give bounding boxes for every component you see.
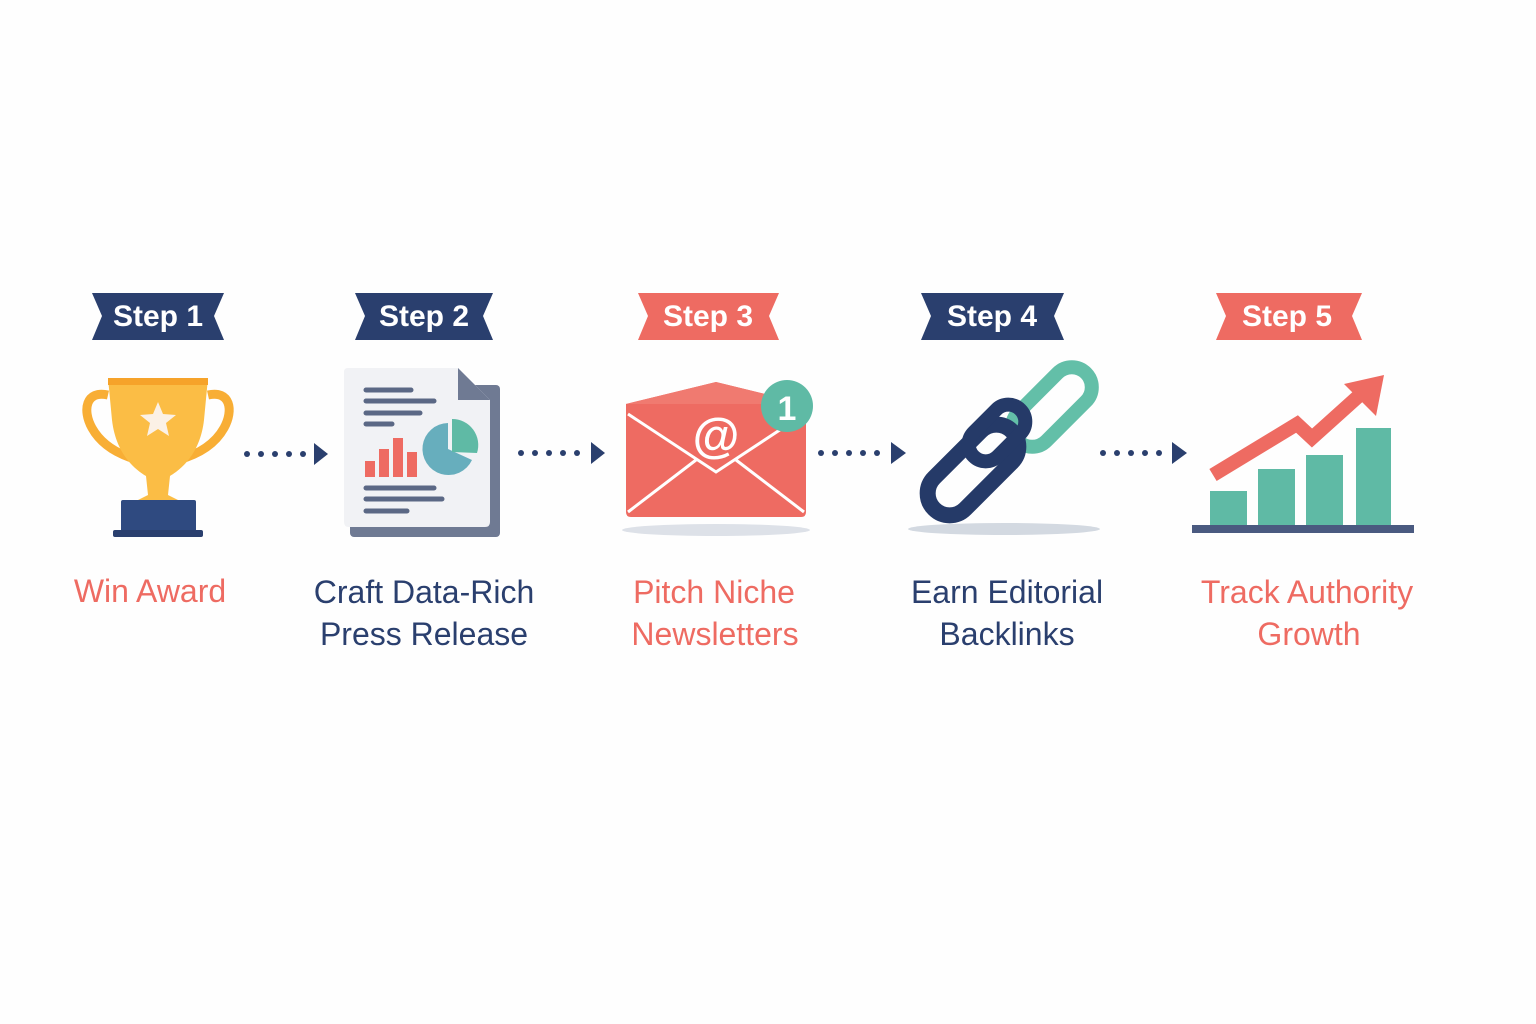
label: craft data-rich press release [314, 574, 534, 652]
label: earn editorial backlinks: Earn Editorial [911, 574, 1103, 610]
icon: envelope with notification: 1 [778, 390, 796, 428]
label: pitch niche newsletters: Pitch Niche [633, 574, 795, 610]
icon: envelope with notification [622, 380, 813, 536]
label: craft data-rich press release: Craft Data-Rich [314, 574, 534, 610]
banner: step 4 [921, 293, 1064, 340]
label: track authority growth: Track Authority [1201, 574, 1413, 610]
label: craft data-rich press release: Press Release [320, 616, 528, 652]
arrow 4 [1100, 442, 1187, 464]
icon: envelope with notification: @ [693, 410, 739, 463]
icon: chain link [908, 359, 1100, 535]
banner: step 1: Step 1 [113, 300, 203, 333]
arrow 3 [818, 442, 906, 464]
arrow 2 [518, 442, 605, 464]
arrow 1 [244, 443, 328, 465]
label: track authority growth [1201, 574, 1413, 652]
icon: growth chart [1192, 375, 1414, 533]
label: pitch niche newsletters: Newsletters [631, 616, 799, 652]
banner: step 5: Step 5 [1242, 300, 1332, 333]
banner: step 1 [92, 293, 224, 340]
banner: step 3: Step 3 [663, 300, 753, 333]
icon: trophy [87, 378, 229, 537]
banner: step 2: Step 2 [379, 300, 469, 333]
banner: step 3 [638, 293, 779, 340]
icon: press release document [344, 368, 500, 537]
label: track authority growth: Growth [1257, 616, 1361, 652]
label: pitch niche newsletters [631, 574, 799, 652]
label: earn editorial backlinks [911, 574, 1103, 652]
label: win award: Win Award [74, 573, 226, 609]
label: earn editorial backlinks: Backlinks [939, 616, 1075, 652]
banner: step 4: Step 4 [947, 300, 1037, 333]
banner: step 2 [355, 293, 493, 340]
banner: step 5 [1216, 293, 1362, 340]
